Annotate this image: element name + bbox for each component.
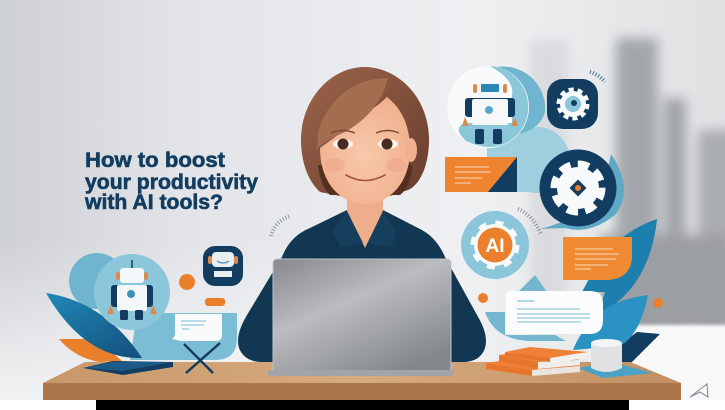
blush — [325, 158, 345, 172]
hair shadow at jaw — [318, 165, 412, 195]
speech bubble — [172, 298, 225, 341]
icon: robot in circle — [94, 254, 170, 330]
icon: orange dot — [179, 274, 195, 290]
ear — [405, 138, 417, 162]
crossed pens — [184, 343, 220, 373]
desk objects — [83, 339, 708, 397]
logo mark — [690, 384, 708, 397]
nose and smile — [346, 175, 385, 180]
face — [320, 97, 410, 204]
orange note card — [563, 237, 632, 280]
leaves — [573, 219, 660, 368]
right illustration cluster — [445, 66, 663, 368]
icon: robot face badge — [203, 246, 243, 286]
network backdrop — [487, 127, 570, 193]
hair back — [301, 67, 429, 196]
left illustration cluster — [46, 246, 243, 362]
title: How to boost — [85, 149, 225, 172]
leaf: blue — [46, 293, 142, 358]
collar — [333, 211, 396, 247]
icon: gear badge — [547, 79, 598, 129]
icon: AI gear: AI — [486, 236, 504, 257]
icon: large gear circle — [540, 150, 624, 230]
light blue backdrop shapes — [69, 253, 237, 360]
sparkle ticks — [271, 72, 605, 236]
neck — [347, 185, 383, 248]
icon: robot in circle — [447, 66, 545, 148]
speech bubble — [506, 291, 603, 334]
eyes — [331, 130, 399, 150]
icon: small orange dots — [478, 293, 663, 308]
title: your productivity — [85, 171, 258, 194]
orange note card — [445, 157, 517, 192]
person — [238, 67, 486, 362]
icon: AI gear — [461, 211, 529, 279]
fringe — [316, 78, 388, 150]
teal coaster book — [578, 362, 653, 378]
torso and arms — [238, 210, 486, 362]
title: with AI tools? — [84, 191, 223, 214]
leaf: orange — [59, 339, 122, 362]
light blue backdrop — [485, 275, 566, 341]
stacked books — [486, 347, 588, 376]
table — [43, 362, 681, 410]
notebook — [83, 361, 173, 375]
laptop — [268, 259, 453, 376]
mug — [591, 339, 622, 372]
